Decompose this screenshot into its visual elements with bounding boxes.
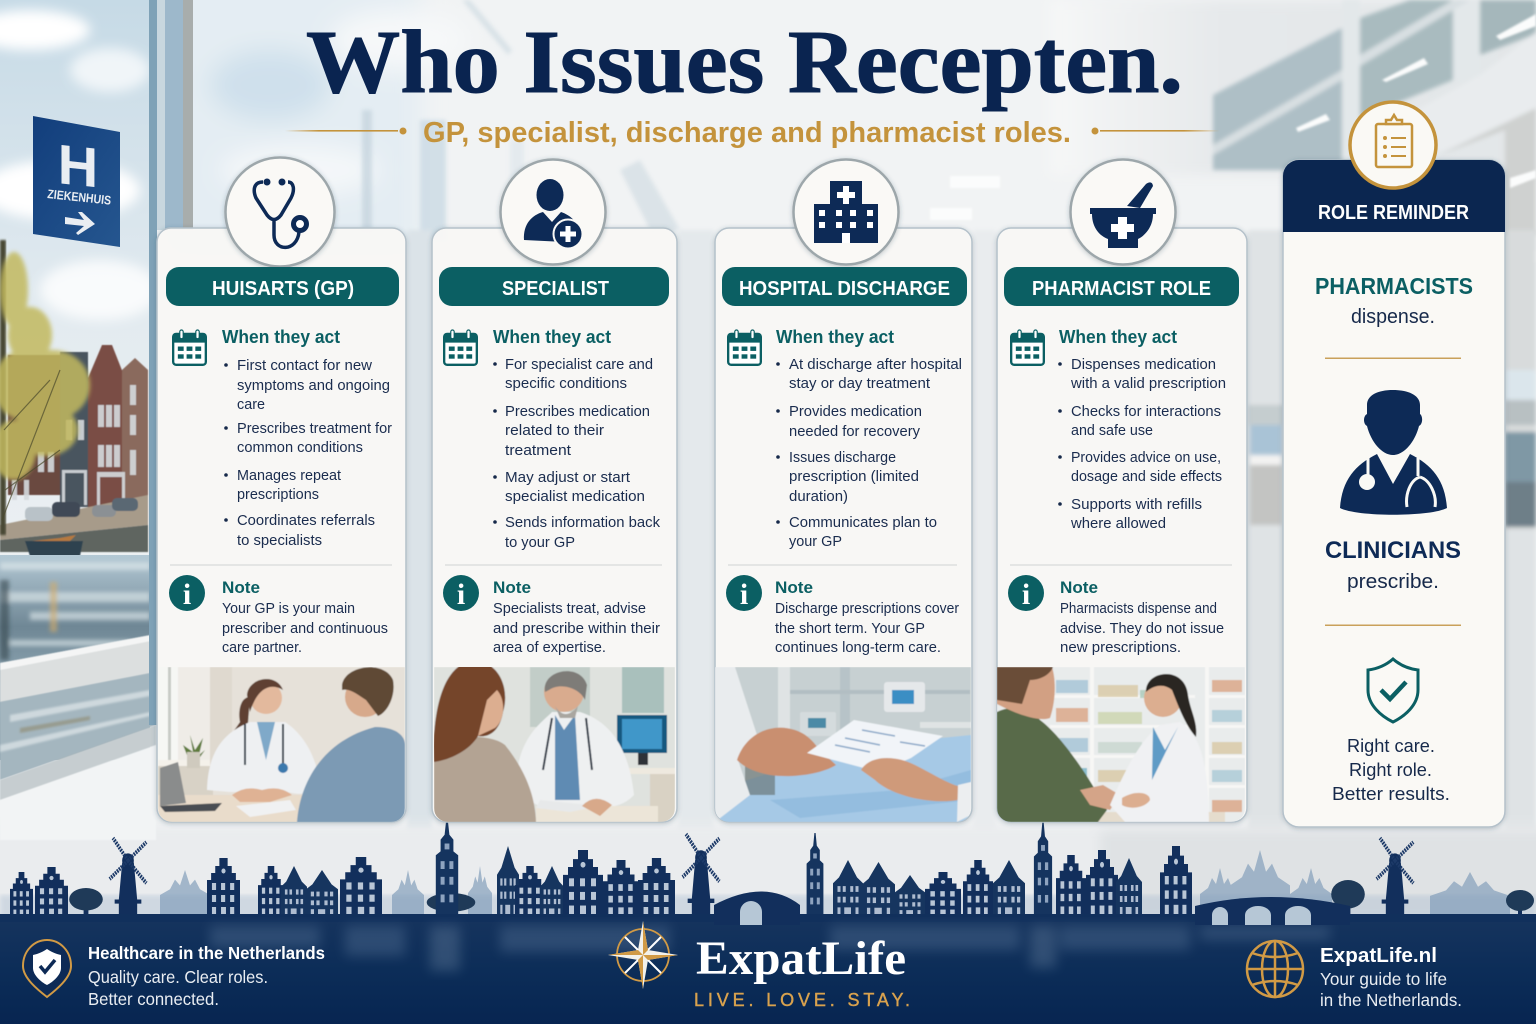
icon: compass star xyxy=(608,921,678,989)
note: prescriber and continuous xyxy=(222,621,388,637)
note: area of expertise. xyxy=(493,640,606,656)
photo: doctor and patient xyxy=(158,667,405,822)
footer right: website: ExpatLife.nl xyxy=(1320,945,1437,967)
skyline xyxy=(0,820,1536,920)
icon: clinician with stethoscope xyxy=(1340,390,1447,515)
when they act list: When they act xyxy=(1059,327,1177,347)
note: continues long-term care. xyxy=(775,640,941,656)
pharmacists dispense xyxy=(1315,273,1473,328)
closing message: Right care. xyxy=(1347,735,1435,756)
icon: calendar xyxy=(444,330,477,365)
closing message xyxy=(1332,735,1450,804)
heading pill: SPECIALIST xyxy=(502,278,609,300)
icon: calendar xyxy=(173,330,206,365)
logo: ExpatLife xyxy=(608,921,910,1010)
reminder header: ROLE REMINDER xyxy=(1318,202,1469,224)
icon: globe xyxy=(1247,941,1303,997)
when they act list: and safe use xyxy=(1071,423,1153,439)
heading pill xyxy=(722,267,967,306)
panel: pharmacist role xyxy=(997,160,1247,822)
columns between the panels xyxy=(407,230,996,830)
pharmacists dispense: dispense. xyxy=(1351,306,1435,328)
when they act list: Dispenses medication xyxy=(1071,357,1216,373)
icon: shield pin xyxy=(23,940,71,997)
note: Note xyxy=(493,578,531,597)
when they act list: Prescribes treatment for xyxy=(237,421,392,437)
note: care partner. xyxy=(222,640,302,656)
heading pill xyxy=(1004,267,1239,306)
when they act list: When they act xyxy=(776,327,894,347)
note: new prescriptions. xyxy=(1060,640,1181,656)
clinicians prescribe: CLINICIANS xyxy=(1325,537,1461,564)
note: Note xyxy=(1060,578,1098,597)
when they act list: Sends information back xyxy=(505,515,661,531)
when they act list: your GP xyxy=(789,534,842,550)
icon: calendar xyxy=(728,330,761,365)
footer left: healthcare badge: Better connected. xyxy=(88,989,219,1009)
when they act list: Manages repeat xyxy=(237,468,341,484)
panel: specialist xyxy=(432,160,677,822)
note: i xyxy=(183,578,191,611)
note: Note xyxy=(775,578,813,597)
when they act list: For specialist care and xyxy=(505,357,653,373)
footer left: healthcare badge: Healthcare in the Netherlands xyxy=(88,943,325,963)
far right glazing and balconies xyxy=(1050,0,1536,175)
left glass and sky behind title xyxy=(170,0,680,250)
when they act list: specific conditions xyxy=(505,376,627,392)
when they act list: specialist medication xyxy=(505,489,645,505)
when they act list: prescription (limited xyxy=(789,469,919,485)
when they act list: needed for recovery xyxy=(789,424,921,440)
note xyxy=(1008,575,1224,656)
when they act list: where allowed xyxy=(1070,516,1166,532)
hospital sign: H xyxy=(58,132,98,199)
note: the short term. Your GP xyxy=(775,621,925,637)
footer left: healthcare badge: Quality care. Clear roles. xyxy=(88,967,268,987)
closing message: Better results. xyxy=(1332,783,1450,804)
heading pill: HOSPITAL DISCHARGE xyxy=(739,278,950,300)
when they act list: prescriptions xyxy=(237,487,319,503)
note: Your GP is your main xyxy=(222,601,355,617)
when they act list: At discharge after hospital xyxy=(789,357,962,373)
heading pill: PHARMACIST ROLE xyxy=(1032,278,1211,300)
note: advise. They do not issue xyxy=(1060,621,1224,637)
when they act list: symptoms and ongoing xyxy=(237,378,390,394)
when they act list: Prescribes medication xyxy=(505,404,650,420)
when they act list: with a valid prescription xyxy=(1070,376,1226,392)
subtitle with gold rules xyxy=(285,117,1220,149)
when they act list xyxy=(776,327,962,550)
icon: hospital building xyxy=(794,160,898,264)
icon: calendar xyxy=(1011,330,1044,365)
when they act list: Communicates plan to xyxy=(789,515,937,531)
hospital sign xyxy=(33,116,120,247)
when they act list xyxy=(222,327,392,549)
icon: clipboard xyxy=(1350,102,1436,188)
window frame pillar xyxy=(149,0,193,725)
hospital sign: ZIEKENHUIS xyxy=(47,187,112,208)
when they act list xyxy=(1058,327,1226,532)
when they act list: to your GP xyxy=(505,535,575,551)
note xyxy=(726,575,959,656)
when they act list: duration) xyxy=(789,489,848,505)
panel: hospital discharge xyxy=(715,160,972,822)
logo: ExpatLife: ExpatLife xyxy=(696,932,906,985)
logo: ExpatLife: LIVE. LOVE. STAY. xyxy=(694,990,910,1010)
footer right: website: Your guide to life xyxy=(1320,969,1447,989)
when they act list: Provides medication xyxy=(789,404,922,420)
when they act list: When they act xyxy=(493,327,611,347)
note xyxy=(443,575,660,656)
footer band xyxy=(0,914,1536,1024)
note: Note xyxy=(222,578,260,597)
footer left: healthcare badge xyxy=(23,940,325,1009)
when they act list: stay or day treatment xyxy=(789,376,930,392)
note: and prescribe within their xyxy=(493,621,660,637)
when they act list: treatment xyxy=(505,443,571,459)
pharmacists dispense: PHARMACISTS xyxy=(1315,273,1473,299)
title: Who Issues Recepten. xyxy=(306,13,1183,112)
heading pill xyxy=(439,267,669,306)
when they act list: Checks for interactions xyxy=(1071,404,1221,420)
note: Specialists treat, advise xyxy=(493,601,646,617)
heading pill xyxy=(166,267,399,306)
clinicians prescribe: prescribe. xyxy=(1347,571,1439,593)
when they act list: dosage and side effects xyxy=(1071,469,1222,485)
photo: specialist consultation xyxy=(434,661,675,822)
when they act list: Supports with refills xyxy=(1071,497,1202,513)
bridges over the canal xyxy=(714,892,1350,925)
note: i xyxy=(740,578,748,611)
when they act list: Coordinates referrals xyxy=(237,513,375,529)
panel: huisarts xyxy=(157,158,406,822)
floor and right-hand interior xyxy=(1248,230,1536,830)
when they act list: First contact for new xyxy=(237,358,373,374)
photo: handing over prescription xyxy=(715,667,971,822)
when they act list: related to their xyxy=(505,423,604,439)
icon: shield check xyxy=(1368,659,1418,722)
icon: stethoscope xyxy=(226,158,334,266)
when they act list: to specialists xyxy=(237,533,322,549)
heading pill: HUISARTS (GP) xyxy=(212,278,354,300)
icon: mortar and pestle xyxy=(1070,160,1176,264)
when they act list: May adjust or start xyxy=(505,470,630,486)
note xyxy=(169,575,388,656)
when they act list xyxy=(493,327,661,551)
when they act list: Provides advice on use, xyxy=(1071,450,1221,466)
when they act list: care xyxy=(237,397,265,413)
when they act list: When they act xyxy=(222,327,340,347)
panel: role reminder xyxy=(1283,102,1505,827)
when they act list: common conditions xyxy=(237,440,363,456)
note: Pharmacists dispense and xyxy=(1060,601,1217,617)
photo: pharmacist at counter xyxy=(997,667,1245,822)
closing message: Right role. xyxy=(1349,759,1432,780)
note: i xyxy=(457,578,465,611)
city view through window xyxy=(0,0,160,840)
subtitle with gold rules: GP, specialist, discharge and pharmacist roles. xyxy=(423,117,1071,149)
footer right: website xyxy=(1247,941,1462,1010)
footer right: website: in the Netherlands. xyxy=(1320,990,1462,1010)
note: Discharge prescriptions cover xyxy=(775,601,959,617)
clinicians prescribe xyxy=(1325,537,1461,593)
reminder header xyxy=(1283,160,1505,232)
note: i xyxy=(1022,578,1030,611)
when they act list: Issues discharge xyxy=(789,450,896,466)
icon: specialist person xyxy=(500,160,606,264)
